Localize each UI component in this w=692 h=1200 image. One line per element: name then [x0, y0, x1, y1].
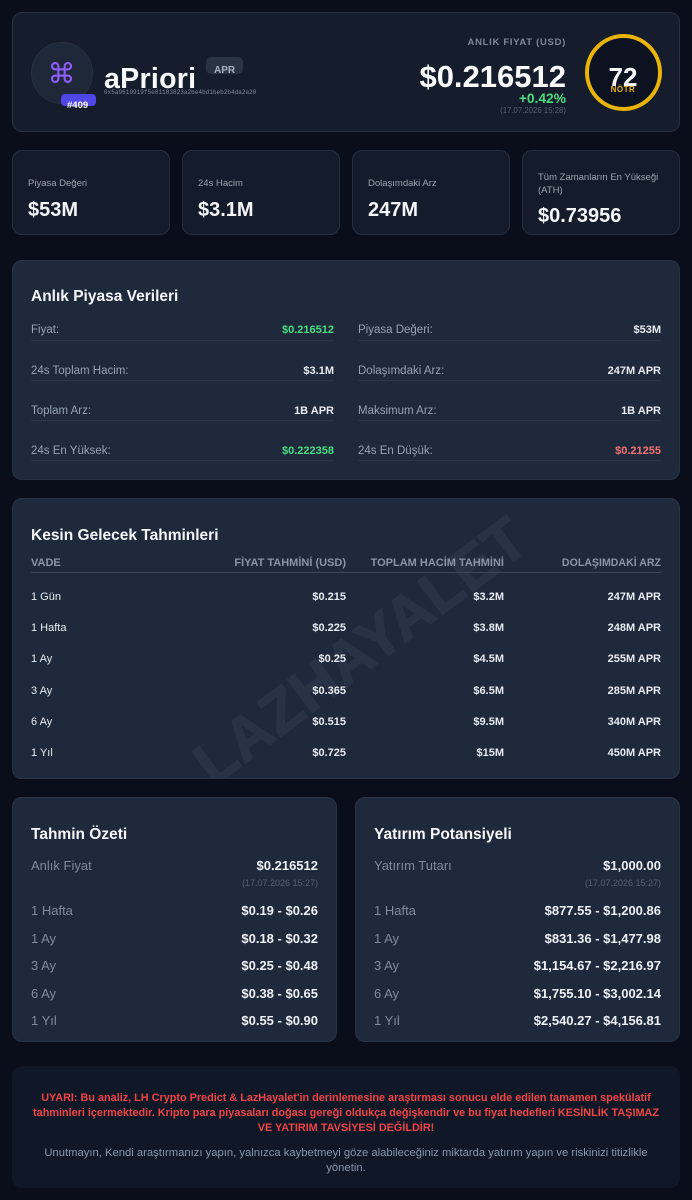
panel: market data: Maksimum Arz: — [358, 405, 437, 417]
panel: forecast summary: $0.18 - $0.32 — [241, 931, 318, 946]
timestamp: (17.07.2026 15:27) — [585, 878, 661, 888]
label: Dolaşımdaki Arz — [368, 178, 437, 189]
panel: future predictions — [12, 498, 680, 779]
panel: market data: 247M APR — [608, 365, 661, 377]
sentiment label: NÖTR — [611, 85, 635, 94]
label: Piyasa Değeri — [28, 178, 87, 189]
row: 1 month: 1 Ay — [31, 653, 52, 665]
rank badge — [61, 94, 96, 106]
panel: future predictions: $0.215 — [312, 591, 346, 603]
panel: future predictions: TOPLAM HACİM TAHMİNİ — [371, 557, 504, 569]
panel: future predictions: $9.5M — [473, 716, 504, 728]
value: $0.73956 — [538, 205, 621, 227]
label: Tüm Zamanların En Yükseği (ATH) — [538, 172, 658, 196]
row: 1 week: 1 Hafta — [31, 903, 73, 918]
panel: disclaimer — [12, 1066, 680, 1188]
panel: future predictions: DOLAŞIMDAKİ ARZ — [562, 557, 661, 569]
row: 6 months: 6 Ay — [31, 986, 56, 1001]
price change: +0.42% — [519, 91, 566, 106]
panel: forecast summary: $0.55 - $0.90 — [241, 1013, 318, 1028]
panel: future predictions: $0.225 — [312, 622, 346, 634]
coin logo — [31, 42, 93, 104]
table header: VADE — [31, 557, 61, 569]
panel: future predictions: $6.5M — [473, 685, 504, 697]
panel: future predictions: 450M APR — [608, 747, 661, 759]
icon: purple command symbol — [51, 62, 72, 83]
panel: investment potential: $877.55 - $1,200.86 — [545, 903, 661, 918]
row: 1 week: 1 Hafta — [374, 903, 416, 918]
row: 6 months: 6 Ay — [374, 986, 399, 1001]
panel: market data: 24s En Düşük: — [358, 445, 433, 457]
current price: $0.216512 — [419, 59, 566, 94]
panel: future predictions: 248M APR — [608, 622, 661, 634]
panel: future predictions: $0.725 — [312, 747, 346, 759]
panel: future predictions: 340M APR — [608, 716, 661, 728]
row: 1 week: 1 Hafta — [31, 622, 66, 634]
panel: market data: $0.216512 — [282, 324, 334, 336]
row: 3 months: 3 Ay — [31, 958, 56, 973]
panel: future predictions: $0.365 — [312, 685, 346, 697]
panel: future predictions: $15M — [476, 747, 504, 759]
advice text — [44, 1147, 648, 1174]
advice text: yönetin. — [326, 1162, 366, 1174]
heading: Kesin Gelecek Tahminleri — [31, 527, 219, 544]
header panel — [12, 12, 680, 132]
panel: forecast summary: $0.25 - $0.48 — [241, 958, 318, 973]
row: 1 year: 1 Yıl — [374, 1013, 400, 1028]
panel: investment potential: $2,540.27 - $4,156.81 — [534, 1013, 661, 1028]
timestamp: (17.07.2026 15:28) — [500, 106, 566, 115]
panel: investment potential — [355, 797, 680, 1042]
panel: market data: $53M — [633, 324, 661, 336]
warning text — [33, 1092, 659, 1134]
panel: future predictions: $0.25 — [318, 653, 346, 665]
advice text: Unutmayın, Kendi araştırmanızı yapın, yalnızca kaybetmeyi göze alabileceğiniz miktarda yatırım yapın ve riskinizi titizlikle — [44, 1147, 648, 1159]
contract address: 0x5a9610919f5e81183823a2be4bd1beb2b4da2a20 — [104, 88, 256, 96]
panel: investment potential: $1,154.67 - $2,216.97 — [534, 958, 661, 973]
row: price: Fiyat: — [31, 324, 59, 336]
warning text: tahminleri içermektedir. Kripto para piyasaları doğası gereği oldukça değişkendir ve bu fiyat hedefleri KESİNLİK TAŞIMAZ — [33, 1107, 659, 1119]
coin name: aPriori — [104, 63, 196, 95]
panel: market data: Piyasa Değeri: — [358, 324, 433, 336]
row: 3 months: 3 Ay — [374, 958, 399, 973]
panel: market data: 1B APR — [621, 405, 661, 417]
stat card: market cap — [12, 150, 170, 235]
sentiment gauge — [585, 34, 662, 111]
label: 24s Hacim — [198, 178, 243, 189]
row: volume: 24s Toplam Hacim: — [31, 365, 129, 377]
panel: future predictions: $4.5M — [473, 653, 504, 665]
panel: investment potential: $1,755.10 - $3,002.14 — [534, 986, 661, 1001]
row: 1 month: 1 Ay — [374, 931, 399, 946]
panel: future predictions: $3.2M — [473, 591, 504, 603]
heading: Anlık Piyasa Verileri — [31, 288, 178, 305]
row: 1 day: 1 Gün — [31, 591, 61, 603]
row: supply: Toplam Arz: — [31, 405, 91, 417]
symbol badge — [206, 57, 243, 74]
value: 247M — [368, 199, 418, 221]
heading: Tahmin Özeti — [31, 826, 127, 843]
score: 72 — [609, 62, 637, 92]
stat card: 24h volume — [182, 150, 340, 235]
panel: forecast summary: $0.38 - $0.65 — [241, 986, 318, 1001]
panel: forecast summary: $0.216512 — [257, 858, 318, 873]
price label: ANLIK FIYAT (USD) — [468, 37, 566, 48]
stat card: all time high — [522, 150, 680, 235]
panel: future predictions: $0.515 — [312, 716, 346, 728]
row: 6 months: 6 Ay — [31, 716, 52, 728]
panel: future predictions: 247M APR — [608, 591, 661, 603]
heading: Yatırım Potansiyeli — [374, 826, 512, 843]
warning text: UYARI: Bu analiz, LH Crypto Predict & LazHayalet'in derinlemesine araştırması sonucu elde edilen tamamen spekülatif — [41, 1092, 651, 1104]
value: $53M — [28, 199, 78, 221]
panel: market data: 1B APR — [294, 405, 334, 417]
timestamp: (17.07.2026 15:27) — [242, 878, 318, 888]
row: 1 year: 1 Yıl — [31, 747, 53, 759]
panel: future predictions: FİYAT TAHMİNİ (USD) — [234, 557, 346, 569]
panel: investment potential: $831.36 - $1,477.98 — [545, 931, 661, 946]
panel: market data: $0.222358 — [282, 445, 334, 457]
panel: market data: $3.1M — [303, 365, 334, 377]
panel: future predictions: 285M APR — [608, 685, 661, 697]
value: $3.1M — [198, 199, 254, 221]
panel: forecast summary: $0.19 - $0.26 — [241, 903, 318, 918]
row: high low: 24s En Yüksek: — [31, 445, 111, 457]
panel: market data: Dolaşımdaki Arz: — [358, 365, 444, 377]
panel: market data: $0.21255 — [615, 445, 661, 457]
rank text: #409 — [67, 100, 88, 111]
row: 1 year: 1 Yıl — [31, 1013, 57, 1028]
panel: market data — [12, 260, 680, 480]
stat card: circulating supply — [352, 150, 510, 235]
warning text: VE YATIRIM TAVSİYESİ DEĞİLDİR! — [258, 1122, 434, 1134]
row: 1 month: 1 Ay — [31, 931, 56, 946]
row: current price: Anlık Fiyat — [31, 858, 92, 873]
row: investment amount: Yatırım Tutarı — [374, 858, 452, 873]
row: 3 months: 3 Ay — [31, 685, 52, 697]
panel: investment potential: $1,000.00 — [603, 858, 661, 873]
panel: future predictions: 255M APR — [608, 653, 661, 665]
panel: future predictions: $3.8M — [473, 622, 504, 634]
panel: forecast summary — [12, 797, 337, 1042]
symbol text: APR — [214, 65, 235, 76]
